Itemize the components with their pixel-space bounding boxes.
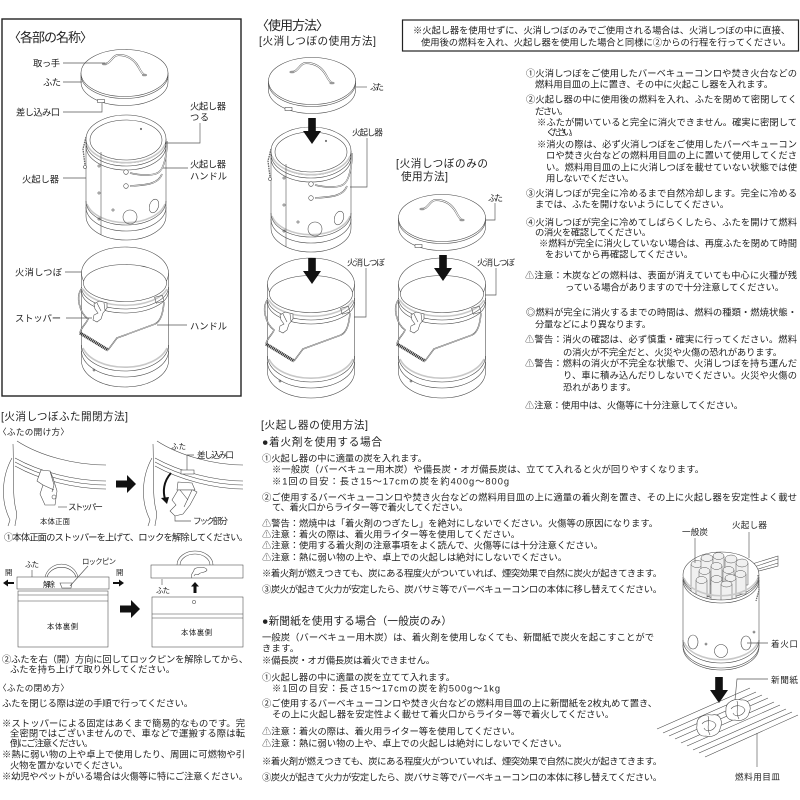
text: fire starter steps: ②ご使用するバーベキューコンロや焚き火台などの燃料用目皿の上に適量の着火剤を置き、その上に火起し器を安定性よく載せ <box>262 492 797 502</box>
lid illustration <box>81 50 168 106</box>
part labels and leader lines: 火消しつぼ <box>15 266 63 278</box>
text: fire starter steps: ⚠注意：使用する着火剤の注意事項をよく読んで、火傷等には十分注意ください。 <box>262 540 603 550</box>
heading: [火起し器の使用方法] <box>261 418 368 432</box>
chimney <box>268 127 352 252</box>
pot <box>396 258 486 398</box>
text: newspaper steps: ※備長炭・オガ備長炭は着火できません。 <box>262 654 435 666</box>
text block: pot usage steps: ①火消しつぼをご使用したバーベキューコンロや焚き火台などの <box>526 68 797 78</box>
labels: 火消しつぼ <box>477 256 515 268</box>
label: lid: ふた <box>156 586 170 595</box>
text: newspaper steps: ⚠注意：着火の際は、着火用ライター等を使用してください。 <box>262 726 520 736</box>
text block: pot usage steps: ③火消しつぼが完全に冷めるまで自然冷却します。完全に冷める <box>526 188 797 198</box>
text block: pot usage steps: 燃料用目皿の上に置き、その中に火起こし器を入れます。 <box>535 78 773 90</box>
text: newspaper steps: ①火起し器の中に適量の炭を立てて入れます。 <box>262 672 455 682</box>
section: usage headings: [火消しつぼの使用方法] <box>259 34 376 48</box>
text: fire starter steps: ⚠警告：燃焼中は「着火剤のつぎたし」を絶対にしないでください。火傷等の原因になります。 <box>262 518 658 528</box>
labels: 火起し器 <box>352 128 383 138</box>
part labels and leader lines <box>15 58 227 332</box>
text: safety notes: ※ストッパーによる固定はあくまで簡易的なものです。完 <box>2 718 245 728</box>
labels: 火起し器 <box>732 520 767 530</box>
part labels and leader lines: つる <box>190 112 209 122</box>
callout: note box: ※火起し器を使用せずに、火消しつぼのみでご使用される場合は、火消しつぼの中に直接、 <box>413 24 790 36</box>
caption: step 1: ①本体正面のストッパーを上げて、ロックを解除してください。 <box>4 532 248 542</box>
text block: pot usage steps: ④火消しつぼが完全に冷めてしばらくしたら、ふたを開けて燃料 <box>526 216 797 228</box>
text: fire starter steps: て、着火口からライター等で着火してください。 <box>272 502 468 512</box>
panel: parts names <box>2 19 241 396</box>
text: fire starter steps: ⚠注意：着火の際は、着火用ライター等を使用してください。 <box>262 528 520 540</box>
text: safety notes: 倒にご注意ください。 <box>10 738 93 748</box>
label: rear side: 本体裏側 <box>181 628 212 637</box>
text: fire starter steps: ※着火剤が燃えつきても、炭にある程度火がついていれば、煙突効果で自然に炭火が起きてきます。 <box>262 568 662 578</box>
text block: pot usage steps: 恐れがあります。 <box>563 382 636 392</box>
part labels and leader lines: ハンドル <box>190 322 227 332</box>
text: newspaper steps: ※着火剤が燃えつきても、炭にある程度火がついていれば、煙突効果で自然に炭火が起きてきます。 <box>262 756 662 766</box>
text block: pot usage steps: ⚠警告：消火の確認は、必ず慎重・確実に行ってください。燃料 <box>525 334 797 344</box>
text: newspaper steps: その上に火起し器を安定性よく載せて着火口からライター等で着火してください。 <box>272 708 614 720</box>
heading: [火消しつぼのみの <box>396 157 488 170</box>
text block: pot usage steps: をおいてから再確認してください。 <box>545 248 693 260</box>
text: fire starter steps: ③炭火が起きて火力が安定したら、炭バサミ等でバーベキューコンロの本体に移し替えてください。 <box>262 584 662 594</box>
icon: curved rotation arrow <box>161 473 171 504</box>
labels: 着火口 <box>771 638 798 649</box>
section: usage headings <box>256 18 376 48</box>
text: close instruction: ふたを閉じる際は逆の手順で行ってください。 <box>2 698 193 708</box>
crumpled newspaper balls <box>697 699 750 737</box>
section: starter usage <box>261 418 797 782</box>
label: body front: 本体正面 <box>40 517 70 526</box>
part labels and leader lines: 取っ手 <box>33 58 60 68</box>
label: release: 解除 <box>43 580 56 589</box>
extinguisher pot illustration <box>79 247 168 387</box>
labels: ふた <box>370 82 384 92</box>
text block: pot usage steps: ◎燃料が完全に消火するまでの時間は、燃料の種類・燃焼状態・ <box>526 306 797 318</box>
text: safety notes: 全密閉ではございませんので、車などで運搬する際は転 <box>10 728 245 738</box>
arrow: right <box>120 600 140 618</box>
text: fire starter steps: ※1回の目安：長さ15～17cmの炭を約400g～800g <box>272 476 509 486</box>
part labels and leader lines: 火起し器 <box>22 174 60 184</box>
lid <box>268 58 356 114</box>
heading: [火消しつぼふた開閉方法] <box>1 410 128 423</box>
text block: pot usage steps: の消火を確認してください。 <box>535 226 651 238</box>
labels <box>477 193 515 295</box>
label: lid: ふた <box>25 560 39 569</box>
labels <box>682 520 798 782</box>
text block: pot usage steps: ※燃料が完全に消火していない場合は、再度ふたを閉めて時間 <box>539 238 797 248</box>
text block: pot usage steps: っている場合がありますので十分注意してください。 <box>565 282 784 292</box>
labels: ふた <box>488 193 503 203</box>
label: stopper: ストッパー <box>68 502 103 512</box>
subheading: how to open: 〈ふたの開け方〉 <box>0 426 69 437</box>
part labels and leader lines: 差し込み口 <box>16 106 60 118</box>
text: safety notes: ※幼児やペットがいる場合は火傷等に特にご注意ください。 <box>2 770 248 782</box>
text: safety notes: 火物を置かないでください。 <box>10 760 128 770</box>
labels: open directions: 開 <box>5 568 12 577</box>
diagram: lid lifted rear view <box>151 551 243 647</box>
diagram: full usage stack <box>265 58 385 398</box>
labels: 新聞紙 <box>771 674 798 685</box>
text: safety notes <box>2 718 248 782</box>
text: newspaper steps: きます。 <box>262 644 299 654</box>
subheading: how to close: 〈ふたの閉め方〉 <box>0 682 69 693</box>
text: safety notes: ※熱に弱い物の上や卓上で使用したり、周囲に可燃物や引 <box>2 748 245 760</box>
text block: pot usage steps: ください。 <box>546 128 578 138</box>
text: fire starter steps: ⚠注意：熱に弱い物の上や、卓上での火起しは絶対にしないでください。 <box>262 552 567 562</box>
labels <box>347 82 385 317</box>
starter body <box>683 575 759 670</box>
text block: pot usage steps: ださい。 <box>535 106 568 116</box>
diagram: stopper open <box>143 441 243 526</box>
part labels and leader lines: 火起し器 <box>190 160 227 170</box>
label: rear side: 本体裏側 <box>47 622 78 631</box>
diagram: stopper closed <box>3 441 106 526</box>
part labels and leader lines: 火起し器 <box>190 102 227 112</box>
lid <box>398 194 486 250</box>
text block: pot usage steps: ②火起し器の中に使用後の燃料を入れ、ふたを閉めて密閉してく <box>526 94 797 104</box>
text block: pot usage steps <box>525 68 798 410</box>
caption: step 2: ふたを持ち上げて取り外してください。 <box>10 664 175 674</box>
text: newspaper steps: ③炭火が起きて火力が安定したら、炭バサミ等でバーベキューコンロの本体に移し替えてください。 <box>262 772 662 782</box>
text block: pot usage steps: ⚠注意：木炭などの燃料は、表面が消えていても中心に火種が残 <box>525 270 797 280</box>
labels: open directions <box>3 568 124 586</box>
labels: right stopper diagram: ふた <box>171 442 186 451</box>
grate lines <box>657 688 798 757</box>
heading <box>396 157 488 183</box>
text block: pot usage steps: ※消火の際は、必ず火消しつぼをご使用したバーベキューコン <box>537 138 797 150</box>
text: fire starter steps: ①火起し器の中に適量の炭を入れます。 <box>262 452 427 464</box>
arrow down to pot <box>434 255 452 281</box>
arrow: right <box>116 475 136 493</box>
text block: pot usage steps: ロや焚き火台などの燃料用目皿の上に置いて使用してくださ <box>546 150 797 160</box>
callout: note box <box>402 20 798 51</box>
labels: right stopper diagram: フック部分 <box>193 516 228 526</box>
text block: pot usage steps: ⚠注意：使用中は、火傷等に十分注意してください。 <box>525 400 743 410</box>
text block: pot usage steps: ※ふたが開いていると完全に消火できません。確実に密閉して <box>537 116 797 128</box>
diagram: starter with charcoal over grate <box>657 520 798 782</box>
starter handle <box>752 556 778 572</box>
text: newspaper steps: ※1回の目安：長さ15～17cmの炭を約500g～1kg <box>272 682 500 694</box>
text: newspaper steps: 一般炭（バーベキュー用木炭）は、着火剤を使用しなくても、新聞紙で炭火を起こすことがで <box>262 632 654 642</box>
labels: right stopper diagram <box>171 442 234 526</box>
labels: 一般炭 <box>682 526 708 537</box>
charcoal pieces <box>691 552 748 602</box>
section: usage headings: 〈使用方法〉 <box>256 18 329 33</box>
text: newspaper steps: ②ご使用するバーベキューコンロや焚き火台などの燃料用目皿の上に新聞紙を2枚丸めて置き、 <box>262 698 657 708</box>
arrow down to grate <box>710 677 728 703</box>
text block: pot usage steps: までは、ふたを開けないようにしてください。 <box>535 200 729 210</box>
arrow down to chimney <box>303 118 321 144</box>
text: newspaper steps <box>262 632 662 782</box>
subheading: using fire starter: ●着火剤を使用する場合 <box>262 436 382 448</box>
heading: 使用方法] <box>401 170 448 183</box>
caption: step 2: ②ふたを右（開）方向に回してロックピンを解除してから、 <box>2 654 248 664</box>
text block: pot usage steps: の消火が不完全だと、火災や火傷の恐れがあります。 <box>563 346 782 358</box>
labels: open directions: 開 <box>116 568 123 577</box>
section: lid open close method <box>0 410 248 782</box>
labels: 火消しつぼ <box>347 256 385 268</box>
starter back rim <box>683 552 759 598</box>
arrow down to pot <box>303 258 321 284</box>
text: fire starter steps: ※一般炭（バーベキュー用木炭）や備長炭・オガ備長炭は、立てて入れると火が回りやすくなります。 <box>272 464 704 474</box>
caption: step 2 <box>2 654 248 674</box>
part labels and leader lines: ストッパー <box>15 314 61 324</box>
labels: 燃料用目皿 <box>735 771 780 782</box>
text block: pot usage steps: 用しないでください。 <box>546 174 634 184</box>
part labels and leader lines: ふた <box>43 78 61 88</box>
callout: note box: 使用後の燃料を入れ、火起し器を使用した場合と同様に②からの行程を行ってください。 <box>421 36 791 48</box>
chimney starter illustration <box>83 115 167 240</box>
text: newspaper steps: ⚠注意：熱に弱い物の上や、卓上での火起しは絶対にしないでください。 <box>262 738 567 748</box>
labels: right stopper diagram: 差し込み口 <box>197 449 234 460</box>
label: lock pin: ロックピン <box>82 557 116 566</box>
pot <box>265 258 354 398</box>
part labels and leader lines: ハンドル <box>190 172 227 182</box>
text block: pot usage steps: 分量などにより異なります。 <box>535 320 651 330</box>
text: fire starter steps <box>262 452 797 594</box>
diagram: lid locked rear view <box>3 557 124 647</box>
text block: pot usage steps: り、車に積み込んだりしないでください。火災や火傷の <box>563 370 797 380</box>
diagram: pot only usage <box>396 157 515 398</box>
text block: pot usage steps: ⚠警告：燃料の消火が不完全な状態で、火消しつぼを持ち運んだ <box>525 358 797 368</box>
text block: pot usage steps: い。燃料用目皿の上に火消しつぼを載せていない状態では使 <box>546 162 798 172</box>
subheading: using newspaper: ●新聞紙を使用する場合（一般炭のみ） <box>262 614 452 628</box>
heading: parts names: 〈各部の名称〉 <box>8 30 93 45</box>
